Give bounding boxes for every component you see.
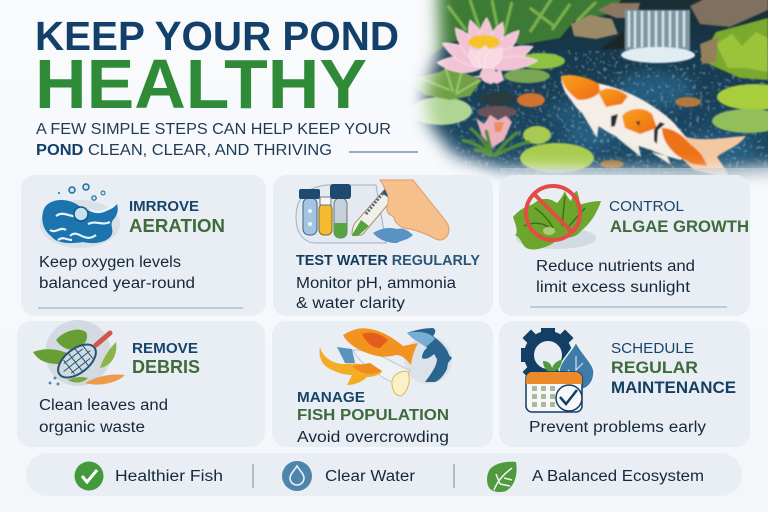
body text: Monitor pH, ammonia bbox=[296, 275, 456, 292]
heading bbox=[611, 341, 736, 397]
heading: CONTROL bbox=[609, 199, 684, 215]
body text: Clean leaves and bbox=[39, 397, 168, 414]
rocks bbox=[571, 15, 618, 39]
koi fish bbox=[582, 102, 672, 166]
body text bbox=[39, 397, 168, 436]
subtitle: POND CLEAN, CLEAR, AND THRIVING bbox=[36, 142, 332, 159]
body text: Avoid overcrowding bbox=[297, 429, 449, 446]
body text bbox=[536, 258, 695, 296]
subtitle bbox=[36, 121, 418, 159]
panel: schedule regular maintenance bbox=[499, 321, 750, 447]
icon: koi group bbox=[319, 328, 452, 396]
body text bbox=[39, 254, 195, 292]
body text: balanced year-round bbox=[39, 275, 195, 292]
body text: & water clarity bbox=[296, 295, 405, 312]
heading: REMOVE bbox=[132, 341, 198, 357]
heading: ALGAE GROWTH bbox=[610, 217, 749, 236]
title: HEALTHY bbox=[35, 45, 367, 123]
photo: koi pond bbox=[400, 0, 768, 190]
title: KEEP YOUR POND bbox=[35, 13, 399, 59]
subtitle: A FEW SIMPLE STEPS CAN HELP KEEP YOUR bbox=[36, 121, 391, 138]
icon: crossed-out algae bbox=[513, 186, 601, 250]
body text: Keep oxygen levels bbox=[39, 254, 181, 271]
heading: TEST WATER REGULARLY bbox=[296, 253, 480, 269]
heading: DEBRIS bbox=[132, 357, 200, 377]
heading: SCHEDULE bbox=[611, 341, 694, 357]
icon: net with leaves bbox=[33, 320, 125, 386]
panel: test water regularly bbox=[273, 175, 493, 316]
icon: leaf bbox=[487, 462, 517, 492]
lower flower bbox=[476, 115, 512, 148]
icon: aeration water splash bbox=[40, 184, 120, 248]
lily pads bbox=[517, 53, 565, 69]
icon: gear, drop and calendar bbox=[521, 328, 594, 412]
label: clear water: Clear Water bbox=[325, 468, 415, 485]
label: healthier fish: Healthier Fish bbox=[115, 468, 223, 485]
panel: improve aeration bbox=[21, 175, 266, 316]
small fish in water bbox=[517, 93, 545, 107]
body text: organic waste bbox=[39, 419, 145, 436]
body text: Prevent problems early bbox=[529, 419, 706, 436]
panel: manage fish population bbox=[272, 321, 493, 447]
panel: remove debris bbox=[17, 320, 265, 447]
heading: FISH POPULATION bbox=[297, 407, 449, 424]
heading: MAINTENANCE bbox=[611, 378, 736, 397]
heading: MANAGE bbox=[297, 390, 365, 406]
heading bbox=[129, 199, 225, 236]
body text: limit excess sunlight bbox=[536, 279, 691, 296]
lotus bbox=[437, 18, 538, 87]
waterfall bbox=[625, 10, 690, 50]
spiky plant bbox=[417, 68, 482, 100]
icon: check bbox=[74, 462, 104, 490]
heading: AERATION bbox=[129, 216, 225, 236]
body text bbox=[296, 275, 456, 312]
benefits bar bbox=[26, 453, 742, 496]
photo fade into cards bbox=[500, 168, 768, 190]
body text: Reduce nutrients and bbox=[536, 258, 695, 275]
icon: water drop bbox=[282, 461, 312, 491]
heading: IMRROVE bbox=[129, 199, 199, 215]
label: balanced ecosystem: A Balanced Ecosystem bbox=[532, 468, 704, 485]
heading bbox=[297, 390, 449, 424]
title bbox=[35, 13, 399, 123]
heading bbox=[609, 199, 749, 236]
icon: test tubes and hand bbox=[296, 180, 449, 243]
heading: REGULAR bbox=[611, 358, 698, 377]
panel: control algae growth bbox=[499, 175, 750, 316]
heading bbox=[132, 341, 200, 377]
foliage at back bbox=[428, 0, 622, 56]
